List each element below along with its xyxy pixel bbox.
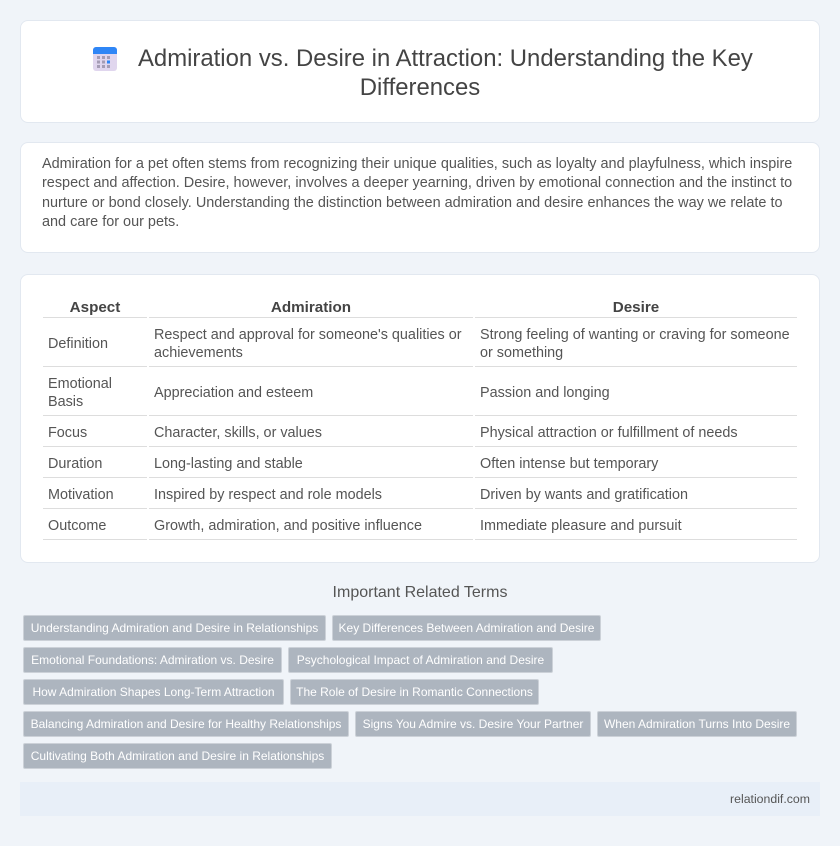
comparison table: Respect and approval for someone's qualities or (154, 327, 462, 343)
panel: header (20, 20, 820, 123)
title: Differences (360, 74, 480, 101)
intro text: nurture or bond closely. Understanding the distinction between admiration and desire enhances the way we relate to (42, 195, 782, 211)
comparison table: Inspired by respect and role models (154, 487, 382, 503)
comparison table: Strong feeling of wanting or craving for someone (480, 327, 790, 343)
row: focus: Focus (48, 425, 87, 441)
row: emotional basis: Emotional (48, 376, 112, 392)
comparison table (43, 299, 797, 540)
icon: calendar (93, 47, 117, 71)
comparison table: achievements (154, 345, 243, 361)
related term tags: How Admiration Shapes Long-Term Attraction (32, 685, 275, 699)
footer (20, 782, 820, 816)
row: duration: Duration (48, 456, 102, 472)
related term tags: Balancing Admiration and Desire for Healthy Relationships (31, 717, 341, 731)
row: definition: Definition (48, 336, 108, 352)
comparison table: Immediate pleasure and pursuit (480, 518, 682, 534)
comparison table: Character, skills, or values (154, 425, 322, 441)
intro text: Admiration for a pet often stems from recognizing their unique qualities, such as loyalty and playfulness, which inspire (42, 156, 792, 172)
related term tags: The Role of Desire in Romantic Connections (296, 685, 533, 699)
heading: related terms: Important Related Terms (333, 584, 507, 601)
related term tags: Cultivating Both Admiration and Desire in Relationships (31, 749, 324, 763)
related term tags: Psychological Impact of Admiration and Desire (297, 653, 544, 667)
intro text: and care for our pets. (42, 214, 179, 230)
related term tags: Emotional Foundations: Admiration vs. Desire (31, 653, 274, 667)
row: motivation: Motivation (48, 487, 114, 503)
intro text (42, 156, 792, 230)
comparison table: Often intense but temporary (480, 456, 658, 472)
footer source: relationdif.com (730, 792, 810, 806)
panel: introduction (20, 142, 820, 253)
comparison table: Growth, admiration, and positive influence (154, 518, 422, 534)
title: Admiration vs. Desire in Attraction: Understanding the Key (138, 45, 753, 72)
comparison table: Long-lasting and stable (154, 456, 303, 472)
row: emotional basis: Basis (48, 394, 83, 410)
related term tags: Signs You Admire vs. Desire Your Partner (363, 717, 583, 731)
comparison table: Driven by wants and gratification (480, 487, 688, 503)
comparison table: Passion and longing (480, 385, 610, 401)
column headers: Desire (613, 299, 659, 316)
related term tags: When Admiration Turns Into Desire (604, 717, 790, 731)
related term tags: Understanding Admiration and Desire in Relationships (31, 621, 318, 635)
comparison table: Appreciation and esteem (154, 385, 313, 401)
column headers: Admiration (271, 299, 351, 316)
column headers: Aspect (70, 299, 120, 316)
panel: comparison table (20, 274, 820, 563)
intro text: respect and affection. Desire, however, involves a deeper yearning, driven by emotional connection and the instinct to (42, 175, 792, 191)
row: outcome: Outcome (48, 518, 106, 534)
comparison table: or something (480, 345, 563, 361)
comparison table: Physical attraction or fulfillment of needs (480, 425, 738, 441)
column headers (43, 299, 797, 540)
related term tags: Key Differences Between Admiration and Desire (339, 621, 594, 635)
row: emotional basis (48, 376, 112, 410)
title (138, 45, 753, 101)
related term tags (23, 615, 797, 769)
